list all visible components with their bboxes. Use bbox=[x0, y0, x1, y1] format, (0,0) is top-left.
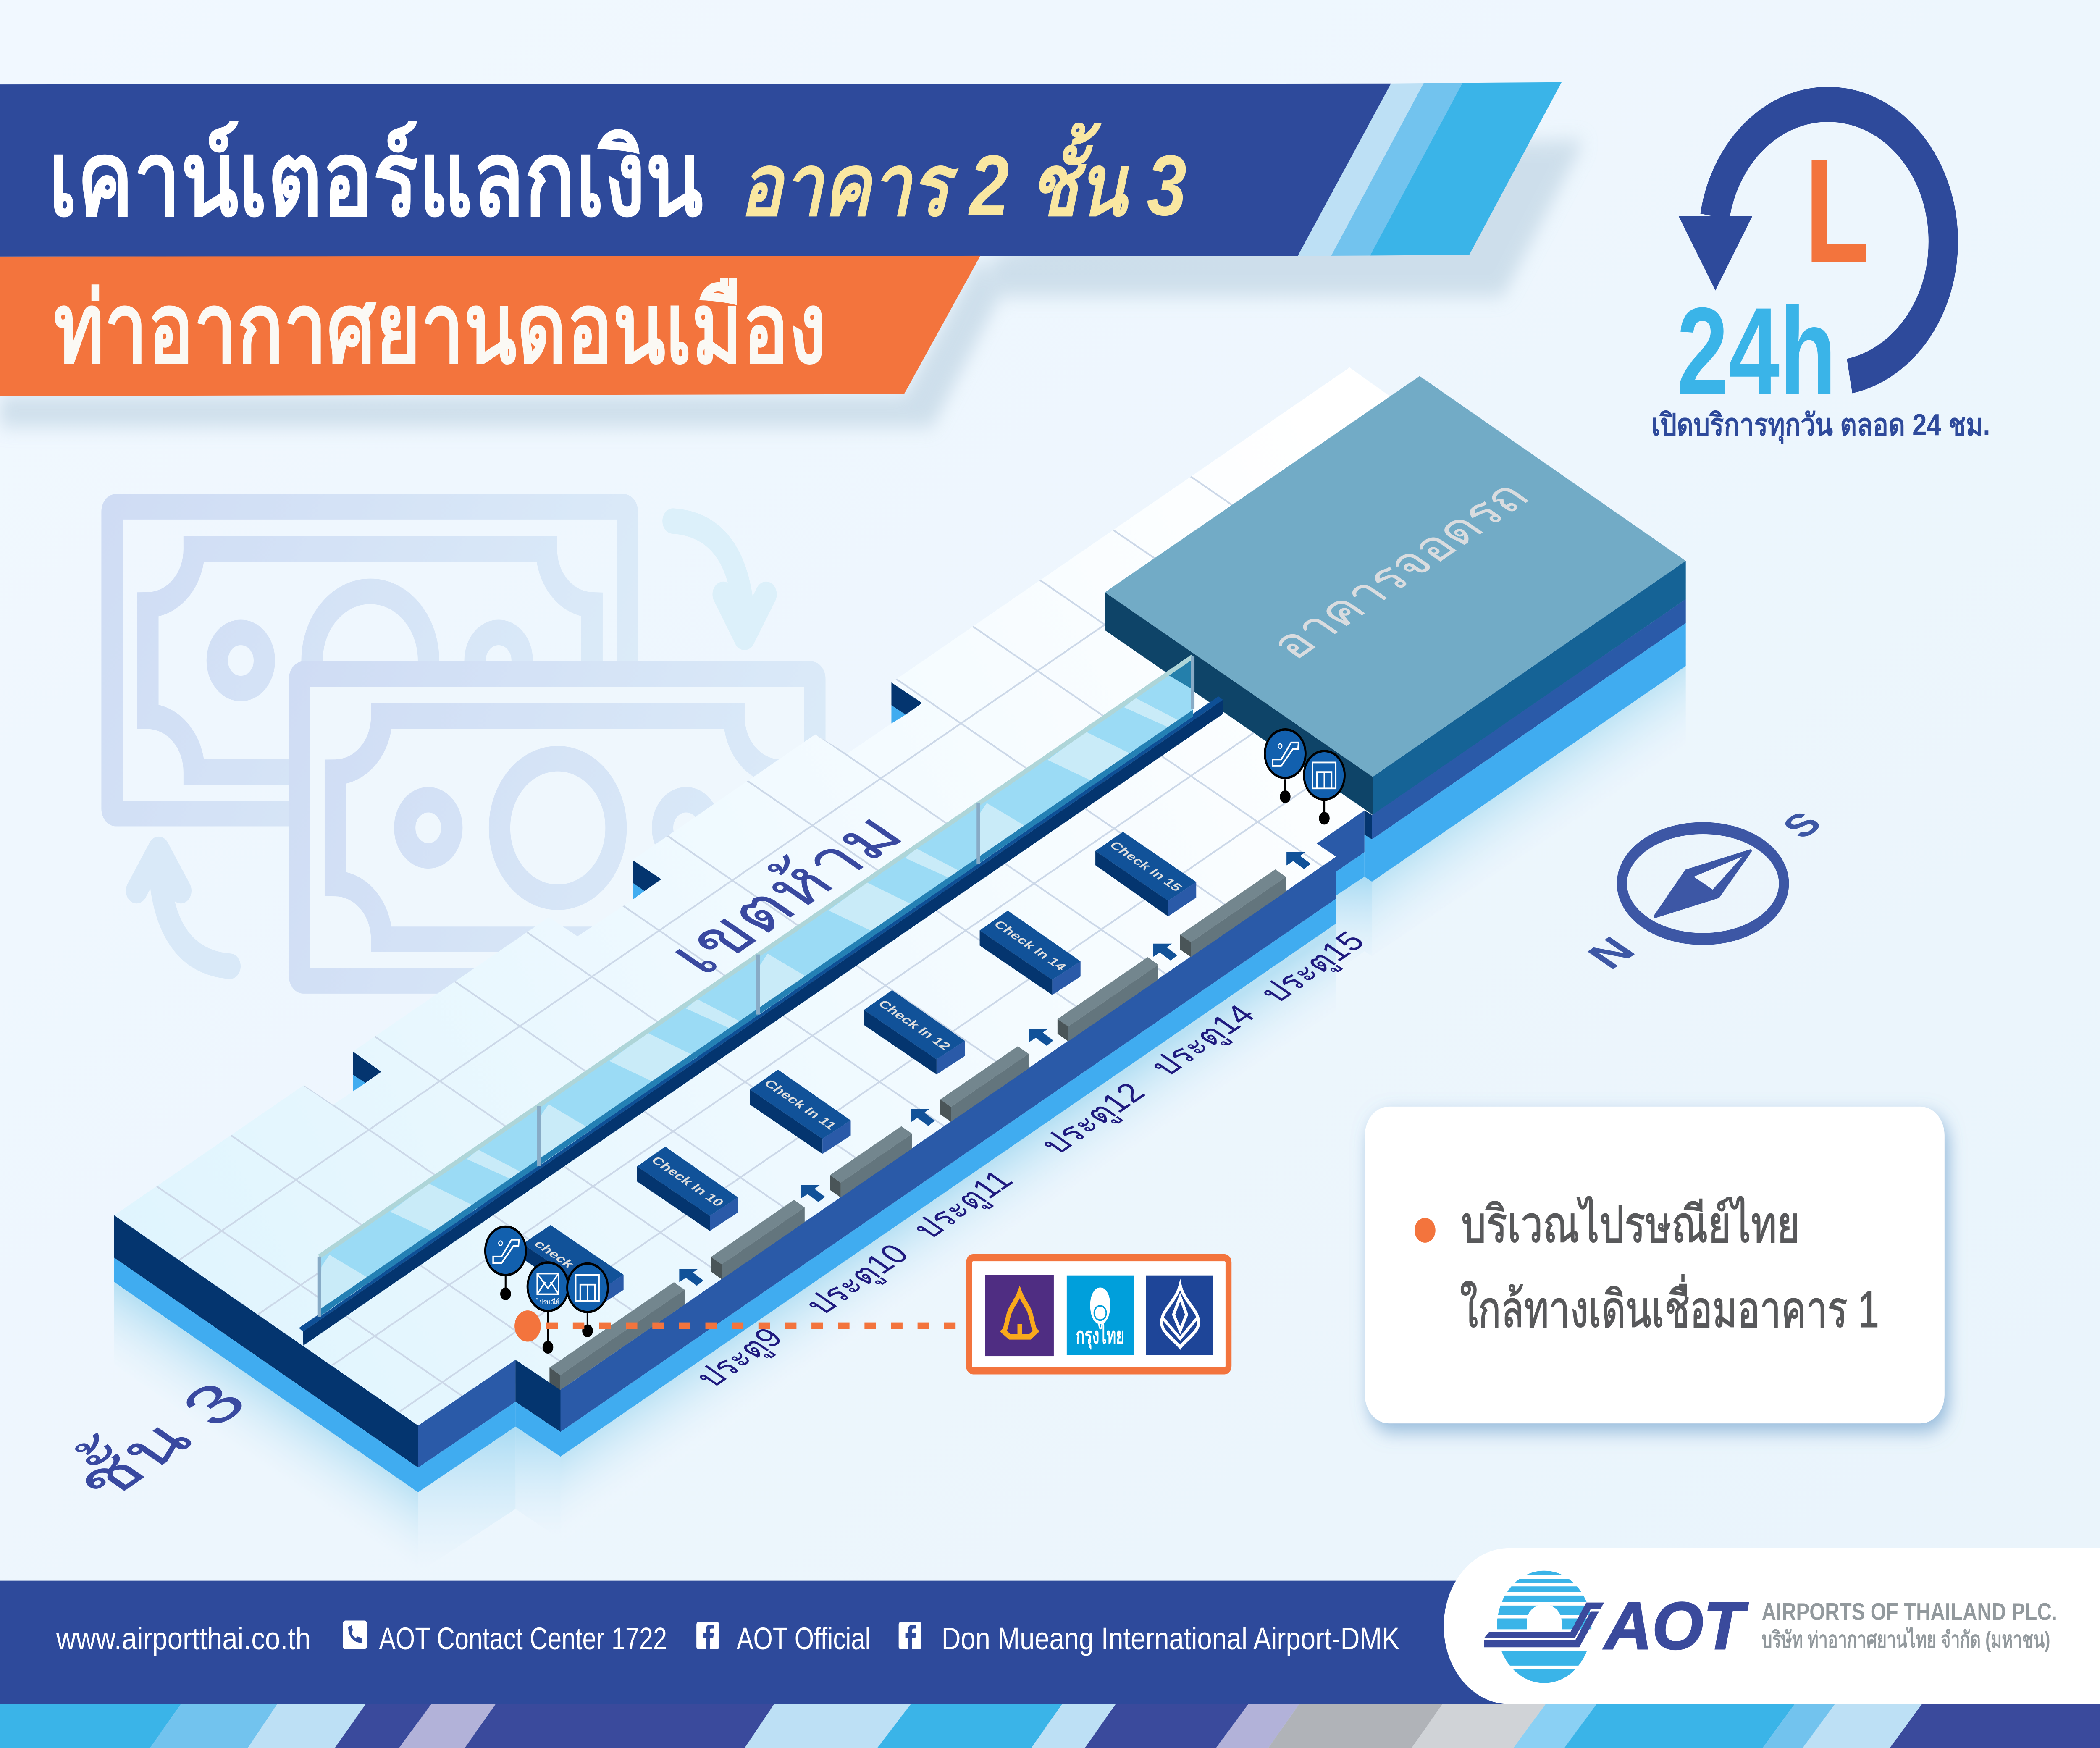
icon: elevator pin front bbox=[567, 1264, 608, 1337]
banner stripe: light bbox=[1298, 83, 1424, 256]
compass ring bbox=[1622, 828, 1784, 939]
footer background bbox=[0, 1581, 2100, 1704]
logo: company name thai: บริษัท ท่าอากาศยานไทย จำกัด (มหาชน) bbox=[1762, 1626, 2050, 1652]
panel: bank logos bbox=[969, 1258, 1228, 1371]
check-in counter 14: Check In 14 bbox=[991, 919, 1069, 973]
icon: escalator pin front bbox=[485, 1227, 526, 1300]
icon: compass bbox=[1577, 805, 1831, 976]
gate labels: ประตู9 bbox=[688, 1322, 792, 1394]
check-in counter: partial bbox=[523, 1225, 624, 1308]
floor plan: terminal 2 floor 3 bbox=[49, 367, 1686, 1573]
glass posts bbox=[319, 656, 1193, 1317]
footer band bbox=[0, 1548, 2100, 1748]
icon: escalator pin back bbox=[1265, 730, 1305, 803]
clock arrowhead bbox=[1679, 216, 1752, 291]
check-in counter 14 bbox=[980, 911, 1081, 995]
gate labels: ประตู12 bbox=[1032, 1077, 1154, 1160]
compass needle bbox=[1655, 851, 1751, 916]
footer text: contact center: AOT Contact Center 1722 bbox=[379, 1622, 667, 1656]
gate labels: ประตู11 bbox=[905, 1165, 1022, 1245]
footer text: website: www.airportthai.co.th bbox=[56, 1622, 311, 1656]
check-in counter 11: Check In 11 bbox=[761, 1078, 840, 1132]
glass floor band bbox=[319, 710, 1193, 1317]
blue bar bbox=[0, 84, 1391, 257]
back banknote bbox=[112, 507, 627, 814]
check-in counter: partial: check bbox=[531, 1238, 577, 1270]
compass N: N bbox=[1577, 929, 1645, 976]
front banknote bbox=[299, 674, 815, 981]
logo: Krungthai bbox=[1067, 1276, 1134, 1355]
24h label: 24h bbox=[1677, 282, 1836, 420]
heading: airport name: ท่าอากาศยานดอนเมือง bbox=[54, 273, 826, 384]
parking label: อาคารจอดรถ bbox=[1257, 473, 1541, 667]
logo: Krungthai: กรุงไทย bbox=[1076, 1323, 1124, 1349]
icon: phone bbox=[343, 1620, 367, 1649]
note line 1: บริเวณไปรษณีย์ไทย bbox=[1461, 1196, 1800, 1253]
icon: facebook bbox=[696, 1622, 719, 1649]
arrow: bottom left curved bbox=[136, 849, 230, 966]
glass barrier and walkway wall bbox=[299, 656, 1223, 1346]
arrow: top right curved bbox=[673, 521, 766, 638]
floor label: ชั้น 3 bbox=[49, 1365, 262, 1512]
wall face bbox=[303, 700, 1223, 1346]
orange bar bbox=[0, 256, 980, 396]
glass base tint bbox=[319, 656, 1193, 1317]
check-in counter 11 bbox=[750, 1070, 851, 1154]
parking left wall bbox=[1105, 592, 1373, 815]
logo: Bangkok Bank bbox=[1146, 1276, 1213, 1355]
dotted leader bbox=[546, 1325, 956, 1327]
bottom stripes bbox=[0, 1704, 2100, 1748]
logo: company name english: AIRPORTS OF THAILAND PLC. bbox=[1762, 1598, 2057, 1626]
parking right wall bbox=[1373, 561, 1686, 815]
gate direction arrows bbox=[679, 852, 1311, 1286]
banner shadows bbox=[0, 140, 1584, 427]
clock hands bbox=[1811, 160, 1866, 262]
gate labels bbox=[688, 926, 1374, 1394]
check-in counter 12: Check In 12 bbox=[875, 998, 954, 1052]
card bbox=[1365, 1107, 1945, 1423]
floor side faces bbox=[114, 599, 1686, 1492]
check-in counter 10 bbox=[637, 1147, 738, 1231]
check-in counter 12 bbox=[864, 990, 965, 1074]
check-in counter 15: Check In 15 bbox=[1106, 840, 1185, 893]
logo plate bbox=[1444, 1548, 2100, 1704]
gate labels: ประตู10 bbox=[798, 1239, 918, 1321]
restricted zone label: เขตห้าม bbox=[651, 801, 919, 986]
glass over parking wall bbox=[1169, 658, 1193, 690]
logos frame bbox=[969, 1258, 1228, 1371]
parking building bbox=[1105, 376, 1686, 815]
footer text: Don Mueang: Don Mueang International Airport-DMK bbox=[942, 1622, 1399, 1656]
panel: location note bbox=[1365, 1107, 1945, 1423]
clock arc bbox=[1715, 105, 1943, 376]
caption: open 24 hours: เปิดบริการทุกวัน ตลอด 24 ชม. bbox=[1651, 408, 1990, 444]
banner stripe: cyan bbox=[1370, 82, 1562, 256]
icon: 24 hour clock bbox=[1651, 105, 1990, 444]
gate labels: ประตู15 bbox=[1252, 926, 1374, 1009]
banner stripe: mid bbox=[1331, 83, 1462, 256]
glass top rail bbox=[319, 656, 1193, 1257]
heading: main title: เคาน์เตอร์แลกเงิน bbox=[48, 121, 703, 238]
service notches bbox=[353, 682, 922, 1092]
icon: post office pin bbox=[528, 1262, 568, 1354]
logo: AOT wordmark: AOT bbox=[1603, 1589, 1749, 1664]
glass highlights bbox=[320, 698, 1182, 1316]
floor surface bbox=[114, 367, 1420, 1425]
bullet bbox=[1415, 1218, 1436, 1243]
title banner bbox=[0, 82, 1584, 427]
icon: post office pin: ไปรษณีย์ bbox=[536, 1297, 559, 1306]
check-in counter 10: Check In 10 bbox=[648, 1155, 727, 1209]
parking roof bbox=[1105, 376, 1686, 777]
logo: AOT globe bbox=[1484, 1571, 1604, 1683]
floor reflections bbox=[114, 666, 1686, 1573]
icon: elevator pin back bbox=[1304, 751, 1345, 824]
gate counters bbox=[549, 869, 1286, 1390]
heading: building and floor: อาคาร 2 ชั้น 3 bbox=[739, 122, 1186, 234]
gate labels: ประตู14 bbox=[1142, 999, 1264, 1083]
note line 2: ใกล้ทางเดินเชื่อมอาคาร 1 bbox=[1460, 1274, 1879, 1338]
wall top bbox=[299, 696, 1223, 1332]
icon: facebook bbox=[899, 1622, 921, 1649]
check-in counter 15 bbox=[1095, 832, 1196, 916]
watermark: banknotes and exchange arrows bbox=[112, 507, 815, 981]
location dot bbox=[514, 1310, 541, 1342]
logo: SCB bbox=[985, 1275, 1054, 1356]
compass S: S bbox=[1773, 805, 1831, 845]
location marker and dotted leader bbox=[514, 1310, 956, 1342]
footer text: AOT Official: AOT Official bbox=[737, 1622, 871, 1656]
